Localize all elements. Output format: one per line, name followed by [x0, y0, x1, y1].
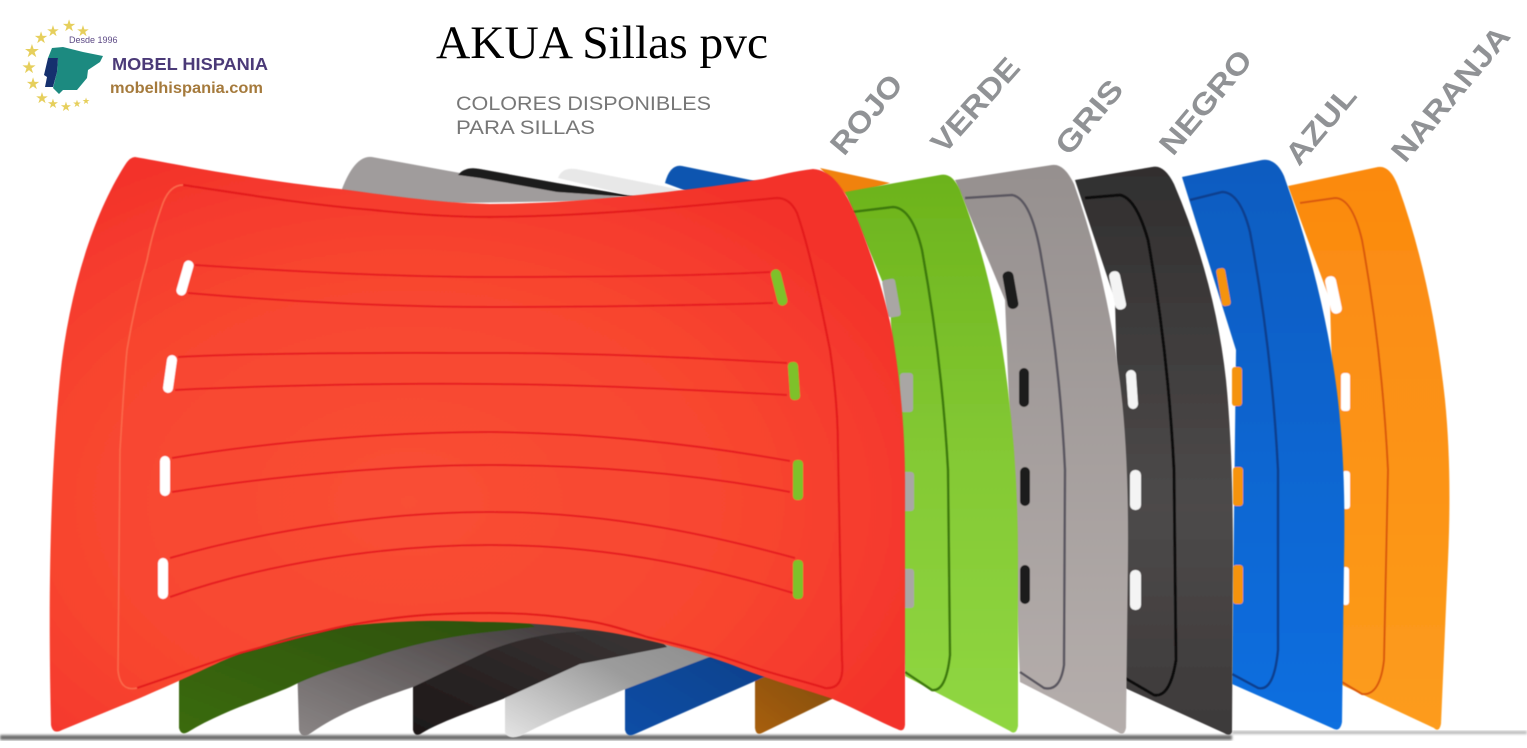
seat groove outline — [118, 185, 842, 689]
logo stars: ★ — [60, 100, 72, 115]
title: AKUA Sillas pvc — [436, 17, 768, 69]
back top: orange — [820, 168, 890, 196]
slots — [882, 278, 914, 608]
logo stars: ★ — [47, 97, 59, 112]
logo stars: ★ — [82, 97, 90, 107]
logo stars: ★ — [26, 74, 40, 93]
panel: NARANJA chair back — [1288, 167, 1449, 730]
left white slots — [158, 259, 195, 599]
seat rail 3 — [172, 432, 790, 492]
back panels peeking above the red seat — [342, 157, 890, 205]
logo website: mobelhispania.com — [110, 80, 263, 97]
logo stars: ★ — [76, 22, 90, 40]
back top: blue — [665, 166, 770, 196]
logo stars: ★ — [62, 16, 76, 35]
back bottom: black — [413, 615, 667, 735]
logo stars — [21, 16, 90, 115]
subtitle: available colours: PARA SILLAS — [456, 118, 595, 139]
label: AZUL: AZUL — [1279, 80, 1363, 171]
back top: white — [558, 169, 700, 198]
logo stars: ★ — [24, 41, 40, 62]
slots — [1324, 275, 1350, 605]
panel: NEGRO chair back — [1075, 167, 1233, 735]
logo stars: ★ — [46, 22, 60, 40]
panel: VERDE chair back — [845, 175, 1018, 733]
logo stars: ★ — [21, 58, 37, 78]
label: ROJO: ROJO — [824, 68, 910, 161]
back top: black — [458, 168, 645, 198]
colour labels — [824, 20, 1517, 171]
panel: AZUL chair back — [1182, 160, 1344, 730]
label: NEGRO: NEGRO — [1153, 44, 1259, 161]
back bottom: orange — [755, 660, 850, 734]
back panels peeking below the red seat — [179, 600, 850, 737]
label: GRIS: GRIS — [1049, 74, 1130, 161]
slots — [1002, 270, 1030, 604]
back bottom: green — [179, 600, 535, 733]
logo text: since 1996: Desde 1996 — [69, 35, 118, 45]
back top: gray — [342, 157, 640, 205]
seat rail 1 — [188, 265, 773, 307]
panel: GRIS chair back — [955, 165, 1128, 734]
subtitle: available colours: COLORES DISPONIBLES — [456, 94, 711, 115]
logo name: MOBEL HISPANIA — [112, 54, 268, 74]
seat rail 2 — [175, 353, 787, 395]
slots — [1216, 268, 1243, 604]
right green slots — [770, 268, 803, 599]
floor shadow — [0, 731, 1527, 740]
label: NARANJA: NARANJA — [1385, 20, 1517, 168]
label: VERDE: VERDE — [925, 51, 1027, 160]
back bottom: white — [505, 620, 712, 737]
slots — [1108, 270, 1141, 610]
subtitle: available colours — [456, 94, 711, 139]
logo stars: ★ — [73, 99, 82, 110]
logo map: Iberia — [44, 47, 103, 94]
back bottom: blue — [625, 640, 775, 735]
seat rail 4 — [170, 512, 795, 597]
logo stars: ★ — [35, 89, 49, 107]
back bottom: gray — [297, 600, 600, 736]
panel: ROJO main seat — [50, 157, 905, 732]
logo: Mobel Hispania — [21, 16, 268, 115]
logo stars: ★ — [34, 28, 48, 47]
